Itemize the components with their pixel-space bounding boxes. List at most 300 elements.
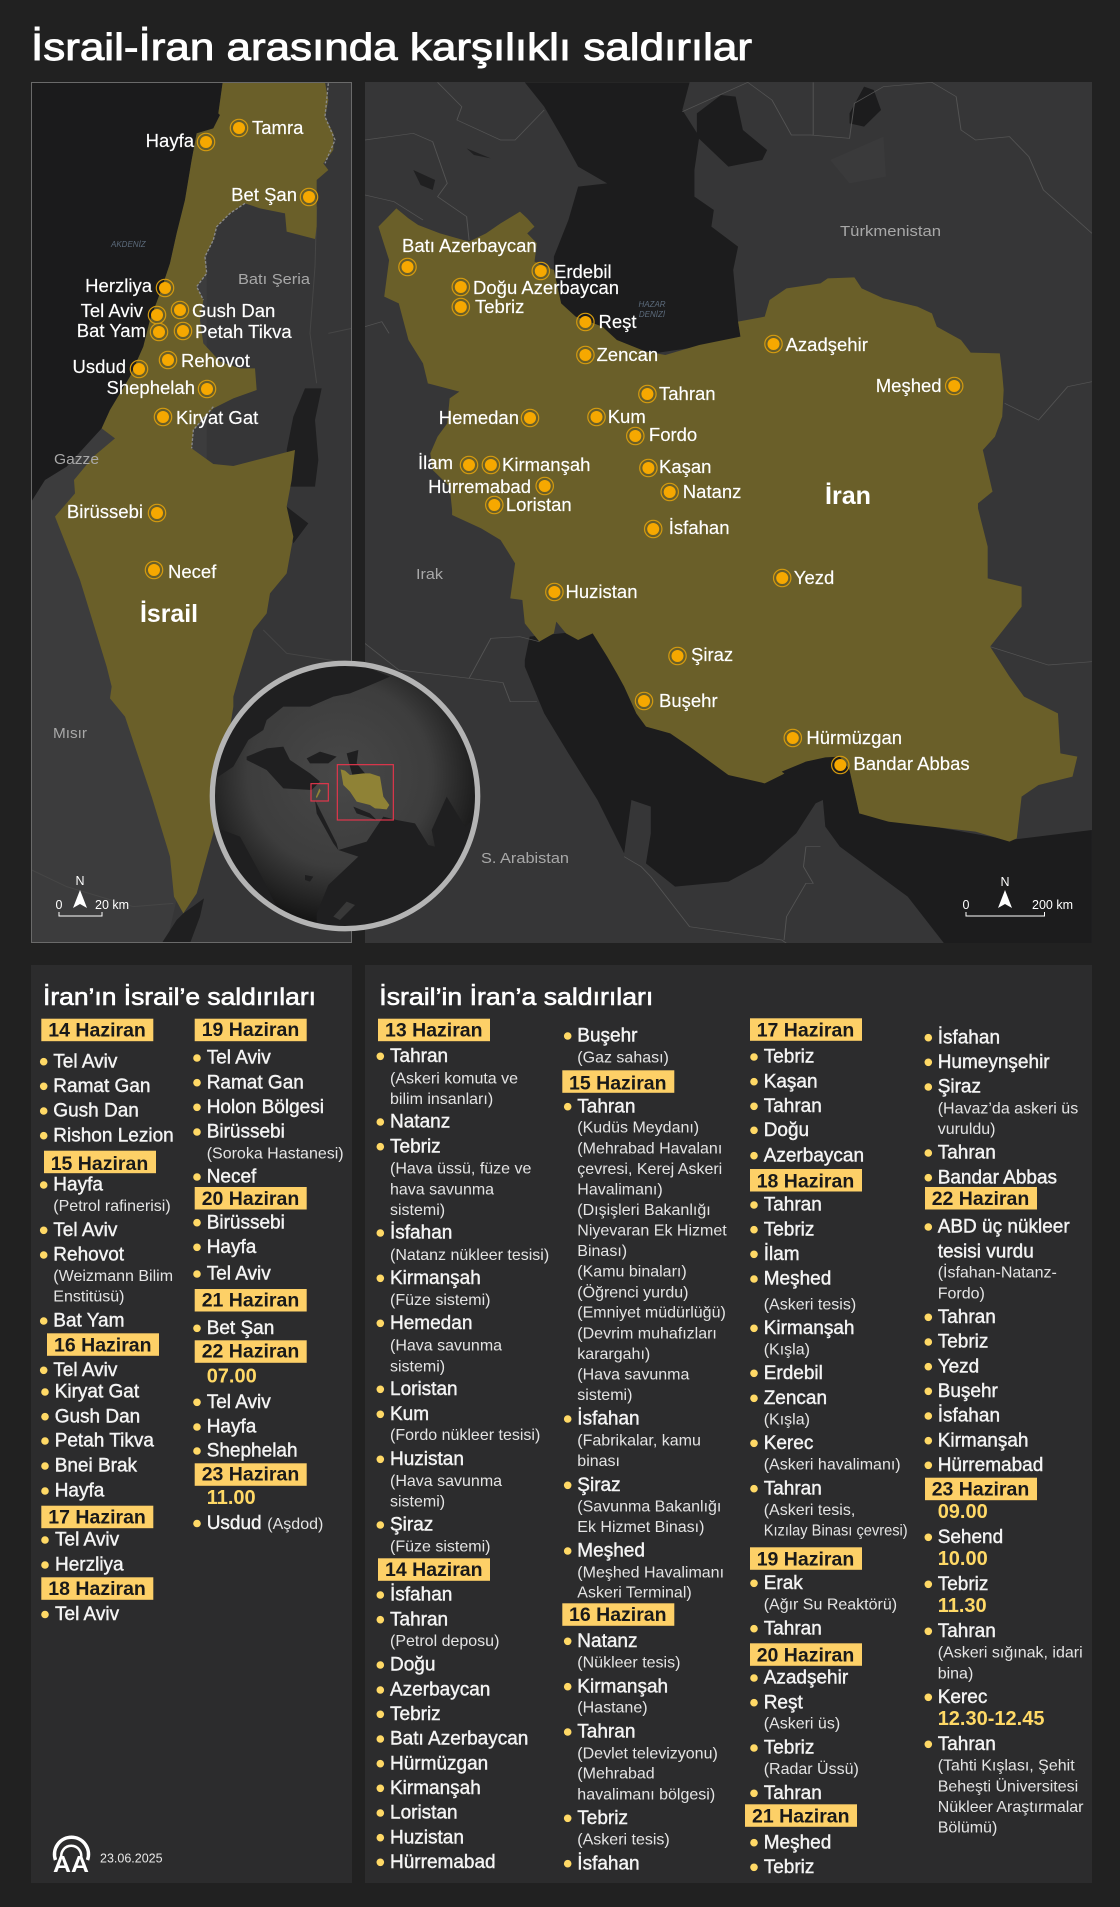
- marker: Şiraz: [669, 644, 733, 665]
- day: 18 Haziran: Zencan: [764, 1388, 827, 1409]
- day: 15 Haziran: (Meşhed Havalimanı: [577, 1564, 724, 1581]
- marker: Herzliya: Herzliya: [85, 275, 153, 296]
- day: 18 Haziran: 18 Haziran: [48, 1578, 146, 1600]
- day: 15 Haziran: Bat Yam: [53, 1311, 124, 1332]
- borders: [365, 82, 1092, 943]
- day: 22 Haziran: (İsfahan-Natanz-: [938, 1263, 1057, 1282]
- label: Hazar Denizi: DENİZİ: [639, 310, 666, 319]
- day: 14 Haziran: (Petrol deposu): [390, 1633, 499, 1650]
- marker: Kaşan: Kaşan: [659, 456, 711, 477]
- day: 18 Haziran: 18 Haziran: [757, 1170, 854, 1192]
- day: 20 Haziran: Tel Aviv: [207, 1264, 271, 1285]
- day: 14 Haziran: Hürmüzgan: [390, 1753, 488, 1774]
- day: 16 Haziran: İsfahan: [577, 1853, 640, 1874]
- day: 15 Haziran: binası: [577, 1453, 620, 1470]
- day: 14 Haziran: Hürremabad: [390, 1852, 496, 1873]
- day: 20 Haziran: [750, 1643, 862, 1804]
- day: 14 Haziran: Kirmanşah: [390, 1778, 481, 1799]
- scale bar: Iran map: 0: [963, 898, 970, 912]
- day: 15 Haziran: (Emniyet müdürlüğü): [577, 1305, 726, 1322]
- panel: İsrail'in İran'a saldırıları: [365, 965, 1092, 1883]
- day: 18 Haziran: (Askeri tesis): [764, 1296, 856, 1313]
- day: 16 Haziran: 16 Haziran: [569, 1604, 667, 1626]
- day: 23 Haziran: 23 Haziran: [202, 1464, 299, 1486]
- day: 18 Haziran: Kerec: [764, 1433, 813, 1454]
- marker: Tebriz: [452, 296, 524, 317]
- day: 20 Haziran: (Askeri üs): [764, 1716, 840, 1733]
- marker: Reşt: Reşt: [598, 311, 637, 332]
- day: 23 Haziran: Tahran: [938, 1621, 996, 1642]
- marker: İlam: [418, 452, 478, 474]
- day: 18 Haziran: [41, 1577, 153, 1625]
- day: 13 Haziran: 13 Haziran: [385, 1020, 483, 1042]
- marker: Fordo: [627, 424, 697, 445]
- day: 15 Haziran: (Dışişleri Bakanlığı: [577, 1202, 711, 1219]
- day: 13 Haziran: (Füze sistemi): [390, 1539, 490, 1556]
- scale bar: Israel map: [56, 874, 129, 916]
- marker: Buşehr: Buşehr: [659, 690, 718, 711]
- marker: Kirmanşah: Kirmanşah: [502, 454, 590, 475]
- day: 16 Haziran: (Askeri tesis): [577, 1832, 670, 1849]
- day: 18 Haziran: Tebriz: [764, 1219, 814, 1240]
- day: 15 Haziran: Ek Hizmet Binası): [577, 1519, 704, 1536]
- day: 13 Haziran: (Askeri komuta ve: [390, 1070, 518, 1087]
- day: 18 Haziran: Kirmanşah: [764, 1318, 855, 1339]
- day: 17 Haziran: Kaşan: [764, 1071, 818, 1092]
- day: 14 Haziran: Doğu: [390, 1655, 435, 1676]
- day: 15 Haziran: [40, 1151, 173, 1332]
- label: Irak: Irak: [416, 566, 444, 583]
- day: 23 Haziran: (Tahti Kışlası, Şehit: [938, 1758, 1075, 1775]
- day: 20 Haziran: Birüssebi: [207, 1212, 285, 1233]
- day: 18 Haziran: Tahran: [764, 1195, 822, 1216]
- day: 23 Haziran: [924, 1478, 1084, 1836]
- day: 18 Haziran: (Kışla): [764, 1341, 810, 1358]
- day: 13 Haziran: hava savunma: [390, 1181, 494, 1198]
- day: 18 Haziran: (Askeri tesis,: [764, 1502, 855, 1519]
- day: 21 Haziran: Tahran: [938, 1143, 996, 1164]
- marker: Hayfa: Hayfa: [146, 130, 195, 151]
- day: 21 Haziran: Tebriz: [764, 1857, 814, 1878]
- day: 15 Haziran: Askeri Terminal): [577, 1585, 692, 1602]
- day: 15 Haziran: Rehovot: [53, 1245, 125, 1266]
- day: 16 Haziran: Tebriz: [577, 1808, 628, 1829]
- Israel territory: [55, 82, 333, 913]
- marker: Usdud: Usdud: [73, 356, 126, 377]
- marker: Meşhed: Meşhed: [876, 375, 942, 396]
- day: 16 Haziran: Hayfa: [55, 1481, 105, 1502]
- day: 23 Haziran: 23 Haziran: [932, 1479, 1029, 1501]
- day: 13 Haziran: (Hava savunma: [390, 1338, 502, 1355]
- heading: Israel attacks: İsrail’in İran’a saldırıları: [379, 984, 653, 1011]
- day: 18 Haziran: Erdebil: [764, 1363, 823, 1384]
- day: 22 Haziran: 22 Haziran: [202, 1341, 299, 1363]
- marker: Bet Şan: Bet Şan: [231, 184, 297, 205]
- marker: Batı Azerbaycan: Batı Azerbaycan: [402, 235, 537, 256]
- day: 23 Haziran: Tahran: [938, 1734, 996, 1755]
- day: 14 Haziran: Gush Dan: [53, 1101, 139, 1122]
- day: 22 Haziran: İsfahan: [938, 1406, 1000, 1427]
- day: 22 Haziran: 07.00: [207, 1366, 257, 1388]
- day: 19 Haziran: [750, 1547, 897, 1639]
- day: 14 Haziran: Tel Aviv: [53, 1051, 118, 1072]
- red locator frames: [337, 765, 393, 820]
- marker: Zencan: Zencan: [596, 344, 658, 365]
- day: 19 Haziran: (Soroka Hastanesi): [207, 1145, 344, 1162]
- day: 13 Haziran: [376, 1019, 549, 1556]
- day: 20 Haziran: (Radar Üssü): [764, 1760, 859, 1778]
- day: 17 Haziran: [750, 1018, 864, 1166]
- day: 17 Haziran: Tahran: [764, 1096, 822, 1117]
- Iran on the globe: [341, 769, 389, 809]
- day: 23 Haziran: Tebriz: [938, 1574, 988, 1595]
- day: 14 Haziran: Huzistan: [390, 1827, 464, 1848]
- day: 19 Haziran: Erak: [764, 1573, 803, 1594]
- day: 13 Haziran: Kirmanşah: [390, 1268, 481, 1289]
- day: 13 Haziran: sistemi): [390, 1358, 445, 1375]
- label: S. Arabistan: S. Arabistan: [481, 850, 569, 867]
- day: 15 Haziran: 15 Haziran: [51, 1153, 148, 1175]
- label: Hazar Denizi: HAZAR: [638, 300, 666, 309]
- day: 21 Haziran: [193, 1289, 307, 1339]
- day: 15 Haziran: Tel Aviv: [53, 1220, 118, 1241]
- day: 13 Haziran: (Fordo nükleer tesisi): [390, 1427, 540, 1444]
- day: 23 Haziran: 09.00: [938, 1501, 988, 1523]
- day: 18 Haziran: İlam: [764, 1244, 800, 1265]
- day: 22 Haziran: Kirmanşah: [938, 1430, 1029, 1451]
- day: 21 Haziran: İsfahan: [938, 1027, 1000, 1048]
- day: 17 Haziran: [41, 1506, 153, 1576]
- day: 13 Haziran: Hemedan: [390, 1313, 472, 1334]
- marker: Azadşehir: Azadşehir: [786, 334, 868, 355]
- day: 15 Haziran: 15 Haziran: [569, 1072, 667, 1094]
- Israel on the globe: [316, 788, 321, 798]
- marker: Şiraz: Şiraz: [691, 644, 733, 665]
- marker: Tebriz: Tebriz: [475, 296, 524, 317]
- day: 14 Haziran: 14 Haziran: [385, 1559, 483, 1581]
- day: 14 Haziran: Tahran: [390, 1609, 448, 1630]
- panel: Israel map: [31, 82, 352, 943]
- day: 22 Haziran: Hayfa: [207, 1417, 257, 1438]
- day: 17 Haziran: Tel Aviv: [55, 1530, 120, 1551]
- day: 19 Haziran: Necef: [207, 1167, 257, 1188]
- day: 16 Haziran: havalimanı bölgesi): [577, 1786, 715, 1803]
- marker: Erdebil: Erdebil: [554, 261, 612, 282]
- marker: Tel Aviv: Tel Aviv: [81, 300, 144, 321]
- day: 20 Haziran: Azadşehir: [764, 1668, 849, 1689]
- day: 14 Haziran: Buşehr: [577, 1026, 638, 1047]
- day: 15 Haziran: (Fabrikalar, kamu: [577, 1433, 701, 1450]
- marker: Birüssebi: Birüssebi: [67, 501, 143, 522]
- day: 15 Haziran: Havalimanı): [577, 1181, 663, 1198]
- day: 17 Haziran: Tebriz: [764, 1047, 814, 1068]
- marker: Doğu Azerbaycan: Doğu Azerbaycan: [473, 277, 619, 298]
- day: 13 Haziran: İsfahan: [390, 1223, 452, 1244]
- day: 13 Haziran: Huzistan: [390, 1449, 464, 1470]
- day: 14 Haziran: Batı Azerbaycan: [390, 1729, 528, 1750]
- globe locator: [207, 660, 480, 933]
- day: 13 Haziran: Tebriz: [390, 1136, 441, 1157]
- day: 13 Haziran: (Natanz nükleer tesisi): [390, 1247, 549, 1264]
- day: 21 Haziran: Meşhed: [764, 1832, 831, 1853]
- marker: İlam: İlam: [418, 452, 453, 473]
- day: 15 Haziran: Niyevaran Ek Hizmet: [577, 1223, 727, 1240]
- day: 13 Haziran: Kum: [390, 1404, 429, 1425]
- day: 20 Haziran: 20 Haziran: [757, 1645, 854, 1667]
- day: 14 Haziran: Tebriz: [390, 1704, 441, 1725]
- day: 13 Haziran: bilim insanları): [390, 1091, 493, 1108]
- day: 20 Haziran: Tahran: [764, 1783, 822, 1804]
- day: 16 Haziran: [40, 1333, 159, 1502]
- marker: Rehovot: Rehovot: [181, 350, 250, 371]
- day: 17 Haziran: Doğu: [764, 1120, 809, 1141]
- marker: Batı Azerbaycan: [399, 235, 537, 276]
- day: 18 Haziran: (Kışla): [764, 1411, 810, 1428]
- day: 14 Haziran: [376, 1026, 669, 1873]
- day: 22 Haziran: 22 Haziran: [932, 1188, 1029, 1210]
- day: 13 Haziran: Loristan: [390, 1379, 458, 1400]
- date: 23.06.2025: [100, 1852, 163, 1866]
- marker: Shephelah: Shephelah: [107, 377, 195, 398]
- Persian Gulf and Gulf of Oman: [525, 630, 1092, 943]
- day: 14 Haziran: [40, 1019, 174, 1146]
- day: 16 Haziran: (Nükleer tesis): [577, 1654, 680, 1671]
- day: 22 Haziran: Tel Aviv: [207, 1392, 271, 1413]
- day: 21 Haziran: Humeynşehir: [938, 1052, 1050, 1073]
- marker: Usdud: [73, 356, 148, 378]
- day: 15 Haziran: (Hava savunma: [577, 1366, 689, 1383]
- day: 17 Haziran: Azerbaycan: [764, 1145, 864, 1166]
- day: 15 Haziran: karargahı): [577, 1346, 650, 1363]
- marker: Tahran: Tahran: [659, 383, 716, 404]
- marker: Tamra: Tamra: [252, 117, 304, 138]
- day: 22 Haziran: ABD üç nükleer: [938, 1217, 1070, 1238]
- day: 22 Haziran: [193, 1340, 307, 1462]
- label: Türkmenistan: Türkmenistan: [840, 223, 941, 240]
- day: 19 Haziran: Birüssebi: [207, 1122, 285, 1143]
- day: 23 Haziran: 12.30-12.45: [938, 1708, 1044, 1730]
- day: 22 Haziran: Yezd: [938, 1356, 979, 1377]
- day: 18 Haziran: Tahran: [764, 1478, 822, 1499]
- day: 14 Haziran: Rishon Lezion: [53, 1125, 174, 1146]
- label: Akdeniz: AKDENİZ: [110, 240, 147, 249]
- day: 15 Haziran: sistemi): [577, 1387, 632, 1404]
- day: 15 Haziran: Hayfa: [53, 1175, 103, 1196]
- day: 16 Haziran: [562, 1603, 718, 1874]
- day: 16 Haziran: Bnei Brak: [55, 1456, 138, 1477]
- day: 14 Haziran: Loristan: [390, 1803, 458, 1824]
- day: 13 Haziran: (Hava savunma: [390, 1473, 502, 1490]
- day: 18 Haziran: Tel Aviv: [55, 1604, 120, 1625]
- day: 19 Haziran: [193, 1019, 344, 1188]
- day: 15 Haziran: İsfahan: [577, 1409, 640, 1430]
- day: 21 Haziran: Şiraz: [938, 1077, 981, 1098]
- day: 22 Haziran: Fordo): [938, 1285, 985, 1302]
- day: 13 Haziran: Tahran: [390, 1046, 448, 1067]
- day: 15 Haziran: (Devrim muhafızları: [577, 1325, 717, 1342]
- label: İsrail: İsrail: [140, 600, 198, 628]
- day: 20 Haziran: 20 Haziran: [202, 1188, 299, 1210]
- label: Batı Şeria: Batı Şeria: [238, 271, 311, 288]
- day: 23 Haziran: 11.00: [207, 1487, 256, 1509]
- day: 15 Haziran: Şiraz: [577, 1475, 621, 1496]
- Anadolu Agency logo: AA: [53, 1851, 89, 1877]
- scale bar: Israel map: 20 km: [95, 898, 129, 912]
- day: 23 Haziran: Bölümü): [938, 1819, 997, 1836]
- day: 23 Haziran: (Aşdod): [267, 1516, 323, 1533]
- day: 22 Haziran: tesisi vurdu: [938, 1241, 1034, 1262]
- day: 23 Haziran: [193, 1463, 323, 1534]
- day: 16 Haziran: Natanz: [577, 1631, 638, 1652]
- day: 21 Haziran: vuruldu): [938, 1121, 996, 1138]
- day: 16 Haziran: Petah Tikva: [55, 1431, 154, 1452]
- day: 17 Haziran: 17 Haziran: [48, 1506, 146, 1528]
- marker: Yezd: Yezd: [794, 567, 834, 588]
- day: 13 Haziran: Natanz: [390, 1112, 450, 1133]
- marker: Kiryat Gat: Kiryat Gat: [176, 407, 258, 428]
- day: 19 Haziran: Ramat Gan: [207, 1072, 304, 1093]
- day: 22 Haziran: Tahran: [938, 1307, 996, 1328]
- label: Hazar Denizi: [638, 300, 666, 319]
- day: 22 Haziran: Tebriz: [938, 1332, 988, 1353]
- panel: Iran map: [365, 82, 1092, 943]
- day: 23 Haziran: bina): [938, 1665, 973, 1682]
- day: 22 Haziran: [924, 1187, 1070, 1476]
- day: 17 Haziran: 17 Haziran: [757, 1020, 854, 1042]
- day: 18 Haziran: [750, 1169, 908, 1540]
- day: 19 Haziran: 19 Haziran: [202, 1019, 299, 1041]
- scale bar: Israel map: N: [75, 874, 85, 888]
- day: 19 Haziran: Tahran: [764, 1618, 822, 1639]
- day: 15 Haziran: (Mehrabad Havalanı: [577, 1140, 722, 1157]
- marker: Bandar Abbas: Bandar Abbas: [853, 753, 970, 774]
- day: 13 Haziran: (Hava üssü, füze ve: [390, 1160, 532, 1177]
- day: 16 Haziran: (Mehrabad: [577, 1766, 655, 1783]
- day: 19 Haziran: (Ağır Su Reaktörü): [764, 1597, 897, 1614]
- day: 19 Haziran: 19 Haziran: [757, 1548, 854, 1570]
- day: 16 Haziran: Tahran: [577, 1722, 635, 1743]
- day: 16 Haziran: Kiryat Gat: [55, 1381, 140, 1402]
- day: 14 Haziran: İsfahan: [390, 1585, 452, 1606]
- day: 14 Haziran: 14 Haziran: [48, 1020, 146, 1042]
- Iran territory: [378, 208, 1077, 842]
- day: 13 Haziran: (Füze sistemi): [390, 1292, 490, 1309]
- day: 22 Haziran: Buşehr: [938, 1381, 999, 1402]
- day: 16 Haziran: (Devlet televizyonu): [577, 1745, 718, 1762]
- day: 13 Haziran: sistemi): [390, 1202, 445, 1219]
- day: 20 Haziran: Tebriz: [764, 1738, 814, 1759]
- day: 15 Haziran: çevresi, Kerej Askeri: [577, 1161, 722, 1178]
- Anadolu Agency logo: [53, 1837, 89, 1877]
- day: 13 Haziran: Şiraz: [390, 1515, 433, 1536]
- marker: Kum: Kum: [608, 406, 646, 427]
- day: 14 Haziran: (Gaz sahası): [577, 1050, 669, 1067]
- day: 20 Haziran: Reşt: [764, 1692, 803, 1713]
- scale bar: Iran map: 200 km: [1032, 898, 1073, 912]
- day: 14 Haziran: Ramat Gan: [53, 1076, 150, 1097]
- day: 14 Haziran: Azerbaycan: [390, 1680, 490, 1701]
- panel: İran'ın İsrail'e saldırıları: [31, 965, 352, 1883]
- day: 22 Haziran: Hürremabad: [938, 1455, 1043, 1476]
- marker: Hürremabad: Hürremabad: [428, 476, 531, 497]
- day: 17 Haziran: Herzliya: [55, 1555, 124, 1576]
- title: İsrail-İran arasında karşılıklı saldırılar: [31, 26, 752, 69]
- day: 23 Haziran: Usdud: [207, 1513, 262, 1534]
- day: 23 Haziran: 10.00: [938, 1548, 988, 1570]
- day: 23 Haziran: (Askeri sığınak, idari: [938, 1645, 1083, 1662]
- day: 15 Haziran: (Öğrenci yurdu): [577, 1283, 688, 1301]
- day: 15 Haziran: Enstitüsü): [53, 1289, 124, 1306]
- heading: Iran attacks: İran’ın İsrail’e saldırıları: [43, 984, 316, 1011]
- day: 21 Haziran: Bandar Abbas: [938, 1167, 1057, 1188]
- day: 15 Haziran: (Kamu binaları): [577, 1264, 687, 1281]
- marker: Huzistan: Huzistan: [566, 581, 637, 602]
- marker: Bat Yam: Bat Yam: [77, 320, 146, 341]
- day: 15 Haziran: Binası): [577, 1243, 627, 1260]
- day: 21 Haziran: [745, 1027, 1078, 1878]
- day: 15 Haziran: [562, 1070, 727, 1602]
- day: 23 Haziran: Nükleer Araştırmalar: [938, 1799, 1084, 1816]
- marker: Natanz: Natanz: [683, 481, 741, 502]
- day: 21 Haziran: 21 Haziran: [202, 1290, 299, 1312]
- day: 15 Haziran: (Petrol rafinerisi): [53, 1198, 171, 1215]
- marker: Petah Tikva: Petah Tikva: [195, 321, 292, 342]
- marker: Hemedan: Hemedan: [439, 407, 519, 428]
- day: 21 Haziran: 21 Haziran: [752, 1806, 850, 1828]
- day: 15 Haziran: (Weizmann Bilim: [53, 1268, 173, 1285]
- marker: Fordo: Fordo: [649, 424, 697, 445]
- day: 18 Haziran: Meşhed: [764, 1269, 831, 1290]
- day: 21 Haziran: (Havaz’da askeri üs: [938, 1100, 1078, 1117]
- marker: Yezd: [774, 567, 834, 588]
- day: 22 Haziran: Shephelah: [207, 1441, 298, 1462]
- day: 20 Haziran: [193, 1187, 307, 1285]
- day: 23 Haziran: Sehend: [938, 1527, 1003, 1548]
- marker: Gush Dan: Gush Dan: [192, 300, 275, 321]
- label: Mısır: Mısır: [53, 725, 87, 742]
- marker: Loristan: Loristan: [506, 494, 572, 515]
- day: 19 Haziran: Tel Aviv: [207, 1048, 271, 1069]
- Caspian Sea: [525, 82, 881, 357]
- day: 18 Haziran: (Askeri havalimanı): [764, 1456, 901, 1473]
- day: 18 Haziran: Kızılay Binası çevresi): [764, 1523, 908, 1540]
- scale bar: Iran map: N: [1000, 875, 1010, 889]
- day: 23 Haziran: Beheşti Üniversitesi: [938, 1777, 1078, 1795]
- day: 23 Haziran: 11.30: [938, 1595, 987, 1617]
- day: 23 Haziran: Kerec: [938, 1687, 987, 1708]
- marker: Tamra: [230, 117, 304, 138]
- day: 20 Haziran: Hayfa: [207, 1237, 257, 1258]
- day: 16 Haziran: 16 Haziran: [54, 1335, 152, 1357]
- scale bar: Iran map: [963, 875, 1073, 916]
- day: 16 Haziran: Gush Dan: [55, 1406, 140, 1427]
- label: Gazze: Gazze: [54, 451, 99, 468]
- marker: Tel Aviv: [81, 300, 166, 324]
- marker: İsfahan: İsfahan: [669, 517, 729, 538]
- marker: Necef: [145, 561, 217, 582]
- day: 16 Haziran: (Hastane): [577, 1700, 648, 1717]
- day: 13 Haziran: sistemi): [390, 1494, 445, 1511]
- day: 21 Haziran: Bet Şan: [207, 1318, 274, 1339]
- day: 15 Haziran: Tahran: [577, 1096, 635, 1117]
- day: 15 Haziran: (Savunma Bakanlığı: [577, 1498, 721, 1515]
- day: 16 Haziran: Tel Aviv: [53, 1360, 118, 1381]
- day: 15 Haziran: (Kudüs Meydanı): [577, 1120, 699, 1137]
- day: 19 Haziran: Holon Bölgesi: [207, 1097, 324, 1118]
- day: 15 Haziran: Meşhed: [577, 1541, 645, 1562]
- marker: Reşt: [577, 311, 637, 332]
- marker: Hürmüzgan: Hürmüzgan: [806, 727, 902, 748]
